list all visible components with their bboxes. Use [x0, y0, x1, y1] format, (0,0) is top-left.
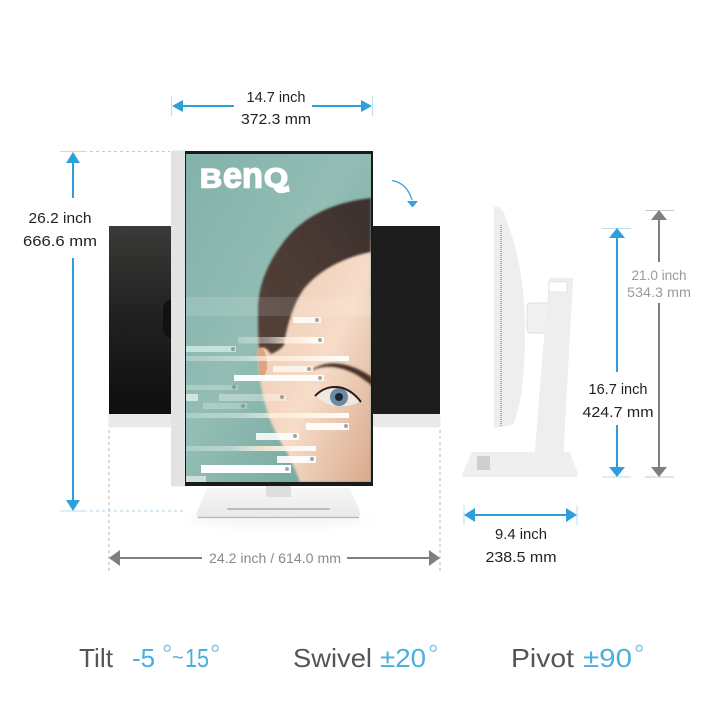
overall width dimension: 24.2 inch: 24.2 inch / 614.0 mm — [209, 550, 341, 566]
depth dimension: 9.4 inch — [464, 505, 577, 566]
screen image — [186, 154, 372, 482]
swivel spec: ±20 — [380, 643, 426, 673]
side view monitor — [462, 207, 578, 477]
tilt spec: ° — [162, 639, 172, 669]
gantt header strip — [186, 297, 371, 316]
max height dimension: 21.0 inch — [627, 210, 691, 477]
side panel — [494, 207, 525, 428]
portrait monitor — [171, 150, 373, 486]
min height dimension: 16.7 inch — [582, 228, 654, 477]
swivel spec: Swivel — [293, 643, 372, 673]
tilt spec: ° — [210, 639, 220, 669]
min height dimension: 16.7 inch: 16.7 inch — [588, 381, 648, 398]
face — [258, 240, 371, 482]
BenQ logo: Q — [264, 163, 288, 193]
pivot spec — [511, 639, 644, 673]
swivel spec: ° — [428, 639, 438, 669]
tilt spec — [79, 639, 220, 673]
min height dimension: 16.7 inch: 424.7 mm — [582, 404, 654, 421]
pivot spec: Pivot — [511, 643, 575, 673]
pivot spec: ±90 — [583, 643, 632, 673]
gantt chart bars — [186, 317, 349, 482]
height dimension: 26.2 inch — [23, 152, 97, 511]
pivot spec: ° — [634, 639, 644, 669]
side hinge — [527, 303, 551, 333]
monitor black frame — [185, 151, 373, 486]
infographic canvas — [24, 91, 690, 668]
height dimension: 26.2 inch: 26.2 inch — [28, 210, 92, 227]
eyebrow — [309, 363, 372, 386]
right landscape monitor — [373, 226, 440, 428]
ear — [258, 348, 267, 377]
tilt spec: Tilt — [79, 643, 114, 673]
BenQ logo — [200, 154, 289, 196]
left landscape monitor — [108, 226, 172, 428]
tilt spec: 15 — [185, 643, 209, 673]
depth dimension: 9.4 inch: 9.4 inch — [495, 526, 547, 543]
max height dimension: 21.0 inch: 534.3 mm — [627, 285, 691, 300]
monitor side bezel — [171, 150, 187, 486]
hair — [258, 198, 371, 354]
tilt spec: -5 — [132, 643, 155, 673]
front stand and base — [188, 486, 368, 525]
width dimension: 14.7 inch: 372.3 mm — [241, 111, 311, 128]
tilt spec: ~ — [172, 647, 184, 669]
height dimension: 26.2 inch: 666.6 mm — [23, 233, 97, 250]
max height dimension: 21.0 inch: 21.0 inch — [632, 268, 686, 283]
width dimension: 14.7 inch: 14.7 inch — [246, 89, 306, 106]
eye — [315, 387, 361, 406]
overall width dimension: 24.2 inch — [109, 550, 440, 566]
side stand base — [462, 452, 578, 477]
BenQ logo: en — [223, 154, 263, 196]
swivel spec — [293, 639, 438, 673]
guide lines — [60, 152, 440, 572]
width dimension: 14.7 inch — [172, 89, 372, 128]
BenQ logo: B — [200, 164, 222, 194]
rotation arrow — [392, 180, 418, 208]
stand knob behind monitor — [163, 299, 171, 338]
depth dimension: 9.4 inch: 238.5 mm — [486, 549, 556, 566]
side stand column — [534, 278, 573, 462]
gantt task markers — [231, 318, 348, 471]
